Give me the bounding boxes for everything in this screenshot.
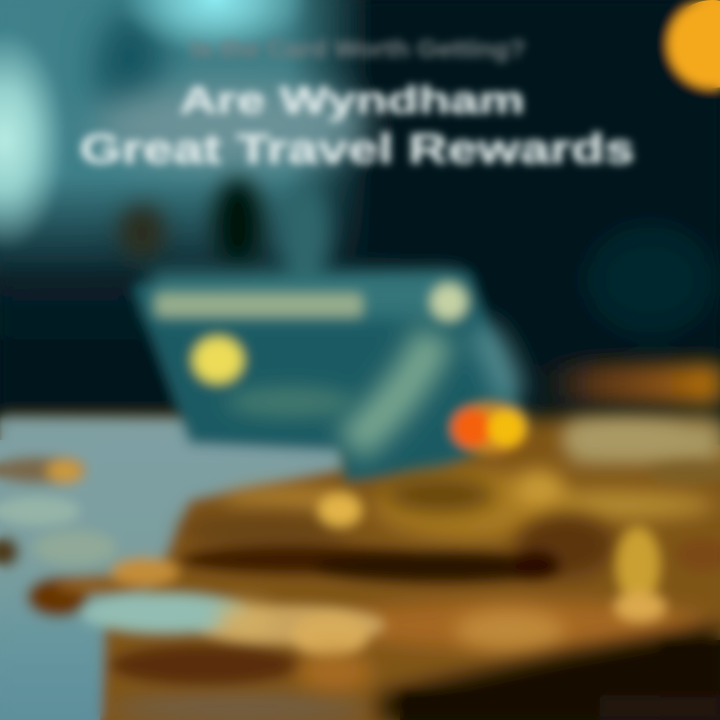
card body xyxy=(132,272,528,482)
title: Great Travel Rewards xyxy=(80,125,634,172)
card logo dot xyxy=(430,283,468,321)
card wave xyxy=(350,335,435,445)
credit card xyxy=(132,272,528,482)
network logo xyxy=(452,403,528,453)
title xyxy=(80,36,634,172)
title: Are Wyndham xyxy=(180,80,524,122)
title: Is the Card Worth Getting? xyxy=(190,36,526,63)
dark foreground table edge xyxy=(380,625,720,720)
icon: orange sun bokeh xyxy=(668,0,720,88)
card name strip xyxy=(155,293,363,317)
gold coins xyxy=(0,457,720,690)
table surface xyxy=(0,364,720,720)
card chip xyxy=(192,336,244,384)
